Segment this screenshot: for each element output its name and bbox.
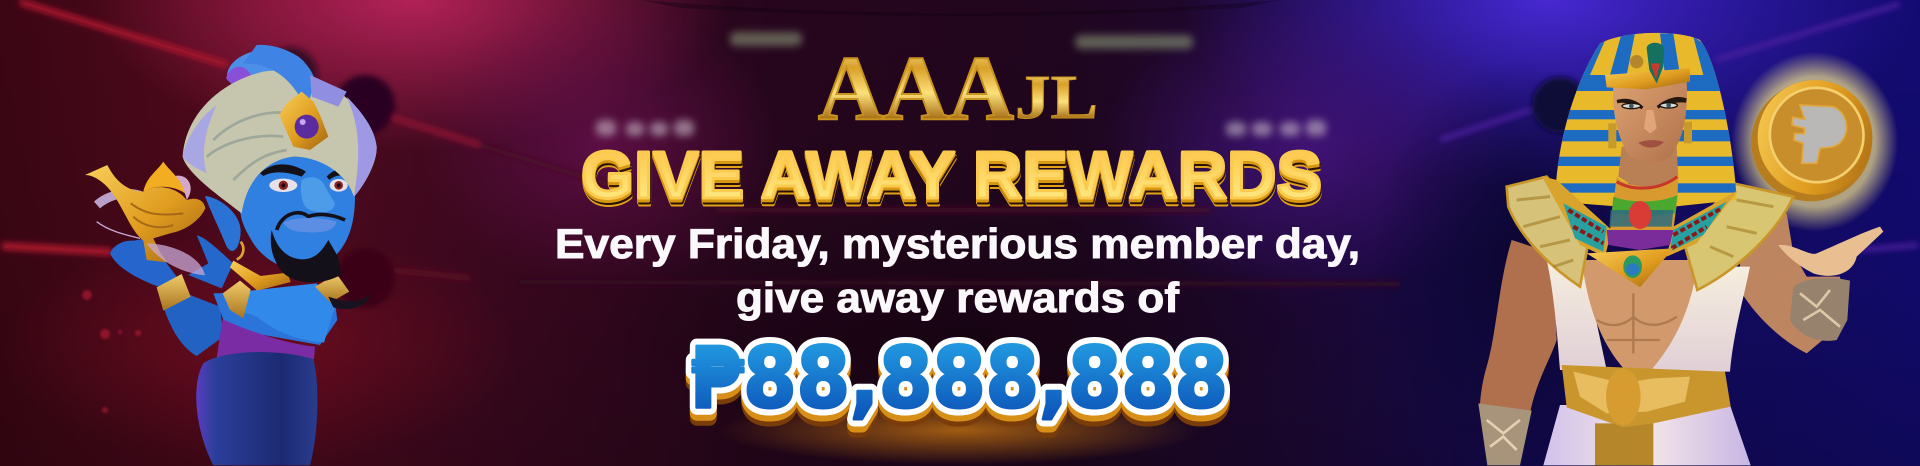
pharaoh skirt [1543,405,1751,465]
text: promotion description: Every Friday, mysterious member day, [555,220,1360,267]
reward amount: ₱88,888,888 [690,329,1228,427]
pharaoh robe and torso [1547,260,1750,383]
text: promotion description [555,220,1360,321]
pharaoh bracers [1478,278,1850,465]
reward amount [690,329,1228,465]
genie lower body [196,351,317,465]
pharaoh neck and face [1608,82,1692,190]
genie collar and bracelets [157,261,371,318]
genie turban jewel [279,92,328,150]
text: promotion description: give away rewards of [736,274,1180,321]
pharaoh arms [1480,213,1883,413]
genie sash [217,319,315,359]
pharaoh belt with scarab [1562,365,1731,427]
pharaoh nemes headdress [1553,30,1740,210]
reward amount: ₱88,888,888 [690,329,1228,427]
pharaoh collar and pectoral [1542,174,1738,287]
heading: give away rewards: GIVE AWAY REWARDS [581,138,1322,213]
logo: AAAJL: JL [1015,64,1098,132]
character: genie with lamp [85,45,377,465]
genie head [205,157,355,282]
pharaoh shoulder plates [1507,177,1793,290]
character: pharaoh with coin [1478,30,1898,465]
genie lamp [85,162,205,275]
genie turban [183,45,377,213]
peso coin [1730,60,1893,223]
logo: AAAJL: AAA [818,37,1014,139]
coin glow [1732,52,1898,232]
genie arms and torso [110,235,337,356]
pharaoh headband and cobra [1605,43,1690,89]
